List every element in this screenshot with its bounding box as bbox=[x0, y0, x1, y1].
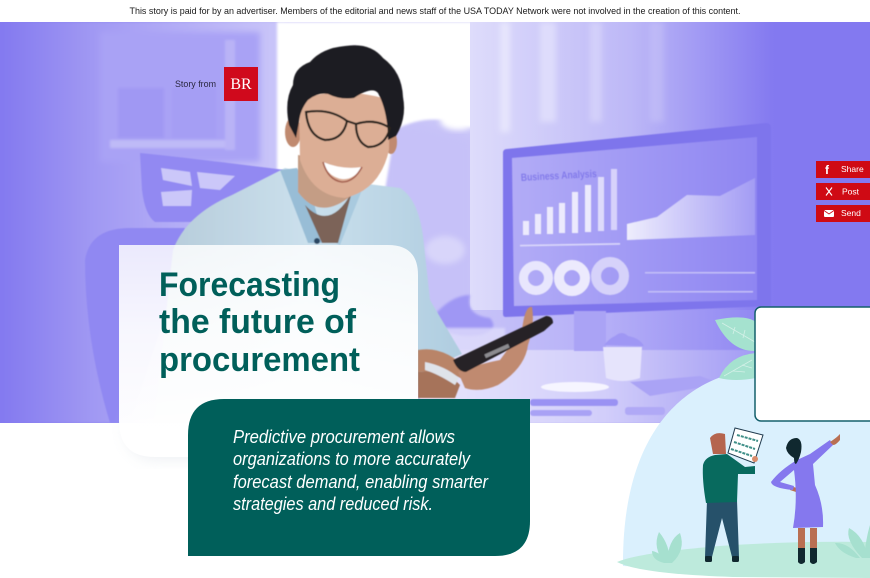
bright window bbox=[277, 22, 476, 264]
legs bbox=[798, 528, 805, 550]
arm akimbo hand bbox=[790, 486, 797, 492]
lilac scenery behind man bbox=[428, 131, 470, 309]
white title card shadow bbox=[125, 400, 415, 460]
icon: upper leaf bbox=[715, 317, 756, 351]
teal summary box: forecast demand, enabling smarter bbox=[233, 472, 489, 492]
story from label: Story from bbox=[175, 79, 216, 89]
torso bbox=[703, 454, 755, 503]
donut charts bbox=[524, 266, 548, 290]
woman pointing bbox=[771, 434, 840, 564]
teal summary box bbox=[188, 399, 530, 556]
white empty callout box bbox=[755, 307, 870, 421]
icon: envelope bbox=[824, 210, 834, 217]
pointing hand bbox=[830, 434, 840, 445]
bar chart bbox=[523, 169, 617, 235]
ears bbox=[285, 117, 301, 147]
boots bbox=[798, 548, 805, 564]
monitor stand bbox=[574, 311, 606, 351]
chair bbox=[85, 153, 285, 423]
area chart bbox=[627, 178, 755, 240]
teal summary box: organizations to more accurately bbox=[233, 449, 471, 469]
icon: x bbox=[826, 188, 832, 196]
BR logo bbox=[224, 67, 258, 101]
icon: lower leaf bbox=[719, 353, 756, 380]
man with clipboard bbox=[703, 428, 763, 562]
shoes bbox=[705, 556, 712, 562]
post button: Post bbox=[842, 186, 860, 196]
hand bbox=[752, 456, 758, 462]
man bbox=[170, 44, 462, 358]
monitor with business analysis dashboard bbox=[503, 123, 771, 317]
title: Forecasting bbox=[159, 266, 340, 304]
monitor with business analysis dashboard: Business Analysis bbox=[521, 168, 597, 184]
share button bbox=[816, 161, 870, 178]
title: procurement bbox=[159, 341, 360, 379]
title: the future of bbox=[159, 303, 356, 341]
white title card bbox=[119, 245, 418, 457]
send button: Send bbox=[841, 208, 861, 218]
left room background bbox=[31, 22, 276, 423]
wall below monitor bbox=[472, 310, 671, 322]
icon: facebook: f bbox=[825, 163, 830, 177]
hero photo: man at desk with purple duotone bbox=[0, 22, 870, 460]
send button bbox=[816, 205, 870, 222]
neck bbox=[298, 155, 355, 208]
plant on desk bbox=[437, 294, 506, 350]
title bbox=[159, 266, 360, 379]
illustration: light blue dome bbox=[623, 368, 870, 578]
disclosure banner: This story is paid for by an advertiser. Members of the editorial and news staff of the USA TODAY Network were not involved in the creation of this content. bbox=[130, 6, 740, 17]
potted plant bbox=[603, 333, 644, 381]
hair bbox=[287, 45, 404, 140]
arm and torso bbox=[170, 168, 462, 358]
disclosure banner bbox=[0, 0, 870, 22]
teal summary box: strategies and reduced risk. bbox=[233, 494, 433, 514]
smile bbox=[323, 162, 362, 179]
share button: Share bbox=[841, 164, 864, 174]
glasses bbox=[306, 111, 390, 147]
face bbox=[299, 92, 390, 198]
desk surface bbox=[420, 350, 755, 423]
legs bbox=[705, 500, 739, 557]
hair bbox=[786, 438, 802, 464]
head bbox=[710, 433, 726, 454]
dress bbox=[771, 440, 833, 528]
icon: right shrub bbox=[835, 525, 870, 558]
teal summary box: Predictive procurement allows bbox=[233, 427, 455, 447]
icon: left shrub bbox=[652, 532, 682, 563]
hand holding tablet bbox=[418, 307, 553, 398]
clipboard bbox=[728, 428, 763, 463]
post button bbox=[816, 183, 870, 200]
BR logo: BR bbox=[230, 76, 252, 93]
ground ellipse bbox=[617, 542, 870, 578]
curtains bbox=[470, 22, 695, 310]
